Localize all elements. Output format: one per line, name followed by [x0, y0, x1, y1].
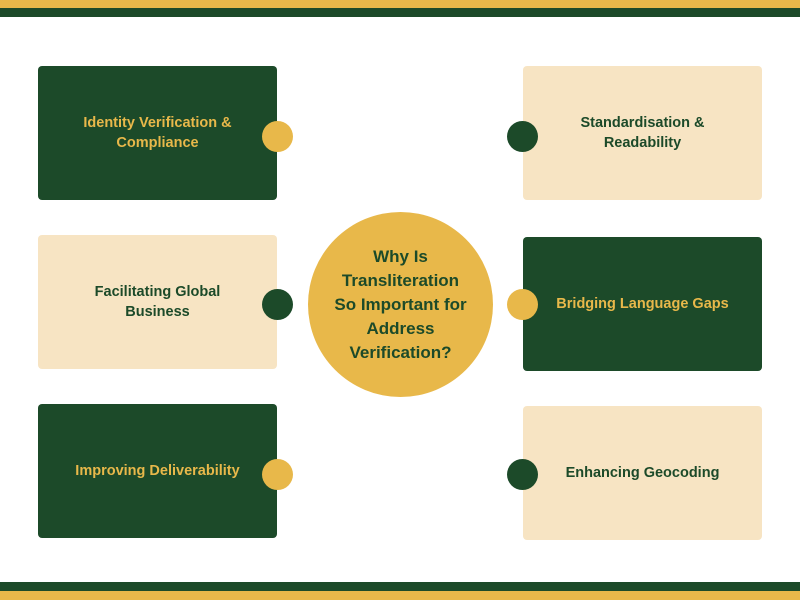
box: identity verification	[38, 66, 277, 200]
dot: standardisation	[507, 121, 538, 152]
box: geocoding: Enhancing Geocoding	[566, 465, 719, 481]
box: standardisation	[523, 66, 762, 200]
bottom bar yellow	[0, 591, 800, 600]
top bar green	[0, 8, 800, 17]
center circle title: So Important for	[334, 294, 467, 314]
box: standardisation: Readability	[604, 135, 681, 151]
box: global business	[38, 235, 277, 369]
center circle title	[308, 212, 493, 397]
dot: language	[507, 289, 538, 320]
box: global business: Facilitating Global	[95, 284, 220, 300]
top bar yellow	[0, 0, 800, 8]
box: language gaps	[523, 237, 762, 371]
box: standardisation: Standardisation &	[580, 115, 705, 131]
box: global business: Business	[125, 304, 190, 320]
dot: geocoding	[507, 459, 538, 490]
center circle title: Why Is	[373, 246, 428, 266]
box: deliverability	[38, 404, 277, 538]
box: geocoding	[523, 406, 762, 540]
dot: global	[262, 289, 293, 320]
box: deliverability: Improving Deliverability	[75, 463, 240, 479]
center circle title: Verification?	[349, 342, 452, 362]
center circle title: Transliteration	[342, 270, 459, 290]
bottom bar green	[0, 582, 800, 591]
box: identity verification: Identity Verification &	[83, 115, 232, 131]
box: identity verification: Compliance	[116, 135, 199, 151]
dot: deliverability	[262, 459, 293, 490]
center circle title: Address	[366, 318, 435, 338]
box: language gaps: Bridging Language Gaps	[556, 296, 729, 312]
dot: identity	[262, 121, 293, 152]
